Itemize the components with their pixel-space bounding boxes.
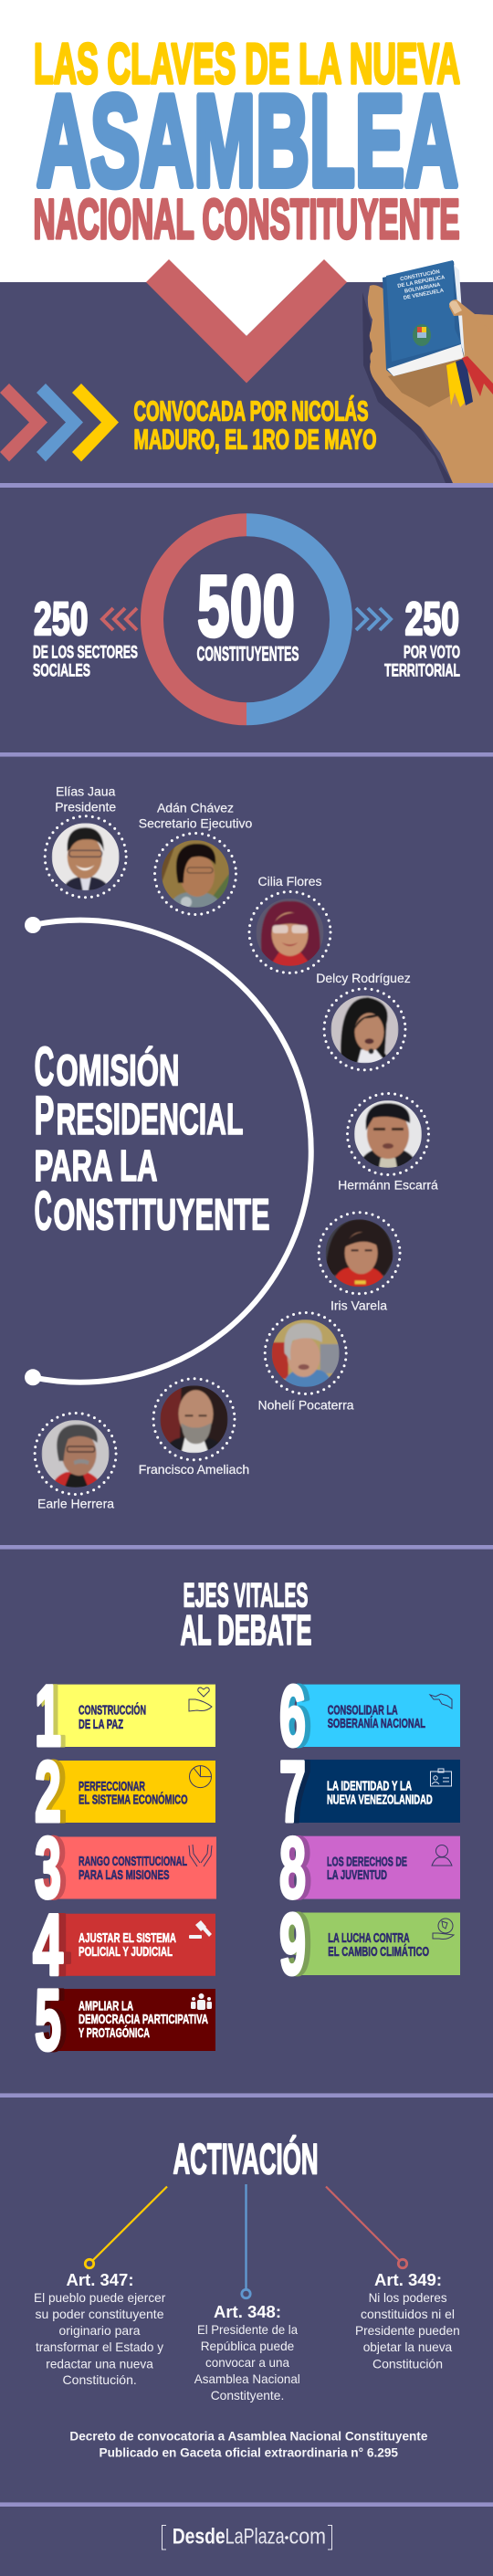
icon: pie clock [190, 1766, 212, 1788]
article 347: originario para [58, 2323, 141, 2338]
divider [0, 1545, 493, 1550]
divider [0, 2502, 493, 2507]
item 2: PERFECCIONAR [79, 1779, 145, 1794]
right figure [384, 593, 460, 680]
article 349: constituidos ni el [361, 2307, 455, 2321]
connector: red [326, 2186, 407, 2268]
illustration: hand holding the constitution: BOLIVARIANA [404, 282, 442, 295]
item 5 [35, 1972, 215, 2069]
right figure: POR VOTO [404, 644, 460, 663]
label: Delcy Rodríguez: Delcy Rodríguez [316, 971, 411, 985]
label: Adán Chávez: Secretario Ejecutivo [139, 815, 252, 830]
article 349 [355, 2270, 460, 2371]
article 349: objetar la nueva [363, 2339, 452, 2354]
item 9: EL CAMBIO CLIMÁTICO [328, 1944, 429, 1960]
item 5: DEMOCRACIA PARTICIPATIVA [79, 2012, 208, 2027]
article 349: Ni los poderes [369, 2290, 447, 2305]
item 7: NUEVA VENEZOLANIDAD [327, 1792, 433, 1808]
footer logo: Desde [173, 2524, 226, 2550]
total label: CONSTITUYENTES [197, 643, 299, 666]
label: Iris Varela: Iris Varela [330, 1299, 387, 1313]
article 347: redactar una nueva [46, 2356, 153, 2371]
portrait: Earle Herrera [35, 1414, 116, 1494]
item 7: LA IDENTIDAD Y LA [327, 1779, 412, 1794]
article 349: Art. 349: [374, 2270, 442, 2289]
item 9: LA LUCHA CONTRA [328, 1930, 410, 1946]
portrait: Adán Chávez [155, 833, 236, 915]
article 348: Asamblea Nacional [194, 2371, 300, 2386]
label: Cilia Flores: Cilia Flores [257, 874, 322, 888]
label: Elías Jaua [55, 784, 116, 814]
article 347 [34, 2270, 166, 2387]
article 348: convocar a una [205, 2355, 289, 2370]
article 348: Constityente. [211, 2388, 284, 2403]
article 347: Constitución. [62, 2372, 137, 2387]
item 2: 2 [35, 1744, 61, 1841]
arc with end dots [25, 917, 311, 1385]
article 347: Art. 347: [66, 2270, 133, 2289]
portrait: Iris Varela [319, 1213, 400, 1294]
label: Elías Jaua: Presidente [55, 799, 116, 814]
commission heading [35, 1036, 270, 1242]
item 2 [35, 1744, 215, 1841]
commission heading: P [35, 1085, 55, 1146]
article 349: Presidente pueden [355, 2323, 460, 2338]
commission heading: RESIDENCIAL [57, 1096, 243, 1144]
item 8: LA JUVENTUD [327, 1867, 387, 1883]
heading: ACTIVACIÓN [173, 2135, 318, 2183]
panel: 500 constituyentes [33, 525, 460, 714]
commission heading: PARA LA [35, 1142, 157, 1191]
item 4 [33, 1897, 215, 1993]
left figure: 250 [34, 593, 88, 645]
heading: EJES VITALES [183, 1576, 309, 1614]
item 8: 8 [279, 1820, 306, 1917]
connector: yellow [85, 2186, 167, 2268]
article 347: transformar el Estado y [36, 2339, 163, 2354]
portrait: Hermánn Escarrá [347, 1094, 429, 1174]
decree note: Publicado en Gaceta oficial extraordinaria n° 6.295 [99, 2445, 398, 2460]
article 348 [194, 2302, 300, 2403]
article 348: El Presidente de la [197, 2322, 298, 2337]
left figure: SOCIALES [33, 661, 90, 680]
item 4: 4 [38, 1897, 70, 1993]
commission heading: ONSTITUYENTE [53, 1191, 270, 1240]
item 4: 4 [33, 1897, 63, 1993]
item 6: CONSOLIDAR LA [328, 1702, 398, 1719]
commission heading: C [35, 1036, 55, 1098]
item 6 [279, 1667, 460, 1764]
three arrows [0, 384, 119, 462]
item 1: 1 [35, 1667, 61, 1764]
item 3: PARA LAS MISIONES [79, 1867, 170, 1883]
item 7: 7 [285, 1744, 311, 1841]
item 3 [35, 1820, 216, 1917]
convocation text [133, 395, 376, 456]
donut chart [152, 525, 341, 714]
big red chevron [146, 259, 347, 384]
panel: activación [34, 2135, 460, 2460]
item 2: EL SISTEMA ECONÓMICO [79, 1792, 188, 1808]
portrait: Cilia Flores [249, 891, 330, 973]
illustration: hand holding the constitution: CONSTITUCIÓN [399, 268, 440, 282]
left figure: DE LOS SECTORES [33, 644, 138, 663]
icon: young person [432, 1845, 452, 1866]
item 4: POLICIAL Y JUDICIAL [79, 1944, 173, 1960]
illustration: hand holding the constitution: DE LA REPÚBLICA [397, 274, 446, 289]
icon: group of people [191, 1993, 212, 2010]
item 1: 1 [39, 1667, 66, 1764]
item 1 [35, 1667, 215, 1764]
item 8: LOS DERECHOS DE [327, 1855, 407, 1870]
divider [0, 752, 493, 757]
item 4: AJUSTAR EL SISTEMA [79, 1930, 176, 1946]
label: Earle Herrera: Earle Herrera [37, 1496, 114, 1510]
item 5: 5 [35, 1972, 61, 2069]
left arrows [102, 608, 137, 630]
label: Elías Jaua: Elías Jaua [56, 784, 116, 799]
item 7 [279, 1744, 460, 1841]
label: Adán Chávez: Adán Chávez [157, 800, 234, 815]
footer logo [163, 2524, 332, 2550]
item 5: 5 [40, 1972, 67, 2069]
connector: blue [242, 2184, 250, 2298]
article 348: Art. 348: [214, 2302, 281, 2321]
icon: map of Venezuela [430, 1694, 452, 1709]
item 7: 7 [279, 1744, 306, 1841]
label: Adán Chávez [139, 800, 252, 830]
article 347: su poder constituyente [35, 2307, 164, 2321]
panel: ejes vitales [33, 1576, 460, 2069]
illustration: hand holding the constitution: DE VENEZUELA [404, 288, 445, 301]
commission heading: OMISIÓN [57, 1045, 179, 1096]
label: Francisco Ameliach: Francisco Ameliach [139, 1462, 249, 1477]
icon: heart in hand [189, 1688, 212, 1711]
item 2: 2 [40, 1744, 67, 1841]
heading: AL DEBATE [181, 1606, 312, 1654]
item 1: CONSTRUCCIÓN [79, 1702, 146, 1719]
article 348: República puede [201, 2339, 294, 2353]
footer logo: com [288, 2524, 326, 2550]
item 6: 6 [279, 1667, 306, 1764]
article 347: El pueblo puede ejercer [34, 2290, 166, 2305]
item 6: SOBERANÍA NACIONAL [328, 1716, 425, 1731]
item 9: 9 [279, 1896, 306, 1992]
decree note: Decreto de convocatoria a Asamblea Nacional Constituyente [69, 2429, 428, 2444]
item 9: 9 [285, 1896, 311, 1992]
portrait: Delcy Rodríguez [324, 989, 405, 1070]
header panel [0, 33, 493, 483]
item 1: DE LA PAZ [79, 1717, 123, 1732]
item 6: 6 [285, 1667, 311, 1764]
item 3: RANGO CONSTITUCIONAL [79, 1854, 187, 1869]
panel: comisión presidencial [25, 784, 438, 1510]
item 3: 3 [40, 1820, 67, 1917]
item 3: 3 [35, 1820, 61, 1917]
portrait: Elías Jaua [45, 816, 126, 898]
portrait: Francisco Ameliach [153, 1379, 235, 1460]
icon: globe in hand [433, 1919, 454, 1940]
icon: id card [431, 1769, 451, 1786]
item 8 [279, 1820, 460, 1917]
icon: open hands [189, 1845, 212, 1866]
total number: 500 [197, 557, 295, 656]
icon: gavel [189, 1920, 212, 1939]
label: Nohelí Pocaterra: Nohelí Pocaterra [257, 1397, 354, 1412]
portrait: Nohelí Pocaterra [265, 1313, 346, 1393]
item 9 [279, 1896, 460, 1992]
illustration: hand holding the constitution [362, 260, 493, 483]
divider [0, 483, 493, 488]
right arrows [356, 608, 391, 630]
commission heading: C [35, 1180, 52, 1242]
article 349: Constitución [372, 2356, 443, 2371]
right figure: 250 [405, 593, 459, 645]
heading [181, 1576, 312, 1654]
footer logo: LaPlaza [226, 2524, 285, 2550]
item 8: 8 [285, 1820, 311, 1917]
item 5: AMPLIAR LA [79, 1999, 133, 2014]
label: Hermánn Escarrá: Hermánn Escarrá [338, 1178, 438, 1193]
decree note [69, 2429, 428, 2460]
left figure [33, 593, 138, 680]
divider [0, 2093, 493, 2098]
item 5: Y PROTAGÓNICA [79, 2024, 150, 2041]
